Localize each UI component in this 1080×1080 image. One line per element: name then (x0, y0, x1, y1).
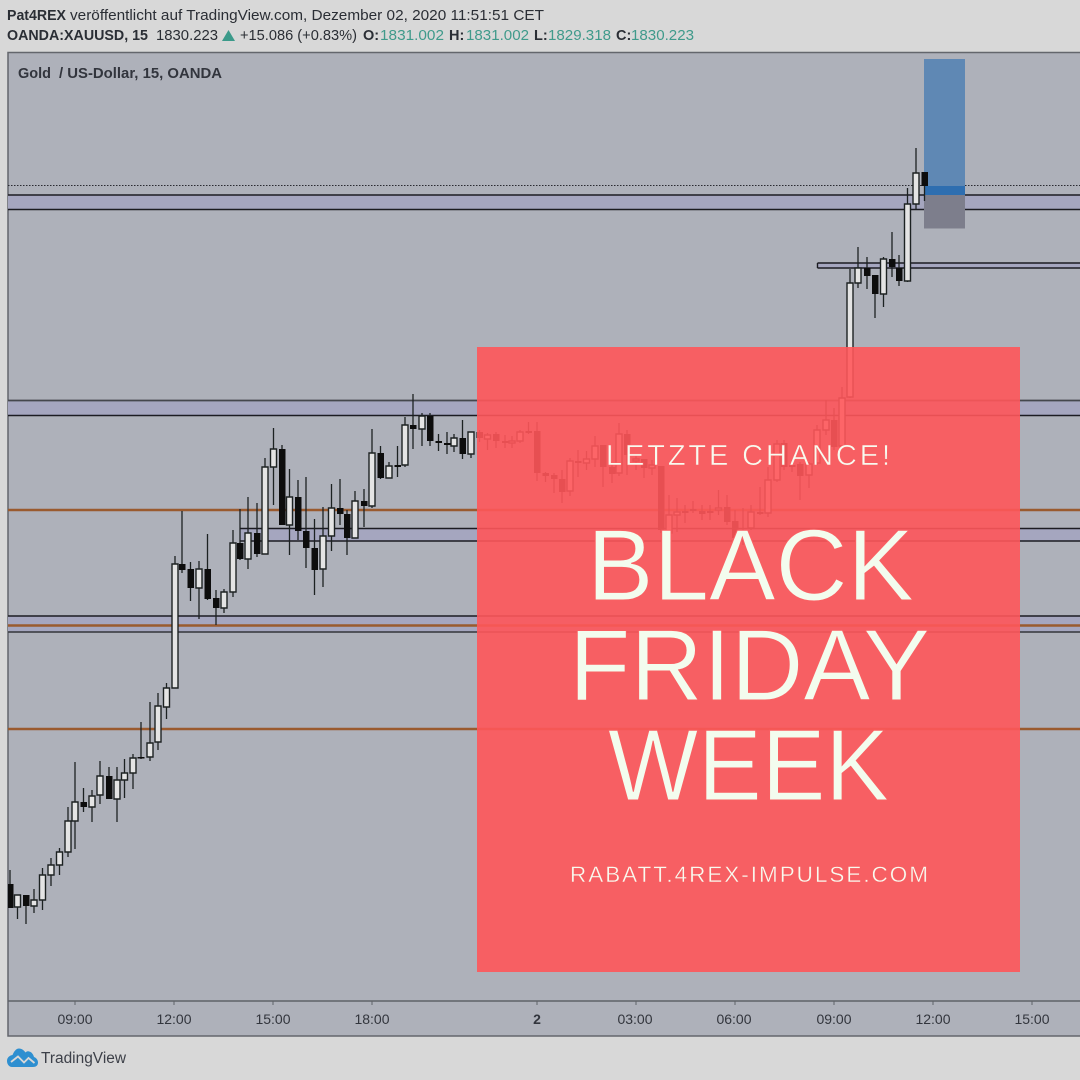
headline (569, 510, 930, 822)
header: publication info: 1831.002 (380, 28, 444, 44)
candlestick series (7, 148, 928, 924)
header: publication info: Pat4REX (7, 8, 66, 24)
header: publication info: 1831.002 (466, 28, 529, 44)
header: publication info (7, 8, 694, 44)
header: publication info: H: (449, 28, 464, 44)
headline: WEEK (608, 710, 889, 822)
time axis (8, 1001, 1080, 1027)
time axis: 09:00 (57, 1011, 93, 1027)
trade box: target and stop (924, 59, 965, 228)
header: publication info: O: (363, 28, 379, 44)
chart title: / US-Dollar, 15, OANDA (59, 66, 223, 82)
time axis: 06:00 (716, 1011, 752, 1027)
website link: RABATT.4REX-IMPULSE.COM (570, 862, 928, 887)
headline: BLACK (587, 510, 914, 622)
time axis: 18:00 (354, 1011, 390, 1027)
header: publication info: 1830.223 (156, 28, 218, 44)
header: publication info: C: (616, 28, 631, 44)
headline: FRIDAY (569, 610, 930, 722)
time axis: 15:00 (1014, 1011, 1050, 1027)
price zones and levels (8, 186, 1080, 729)
header: publication info: veröffentlicht auf TradingView.com, Dezember 02, 2020 11:51:51 CET (70, 8, 544, 24)
time axis: 2 (533, 1011, 541, 1027)
time axis: 15:00 (255, 1011, 291, 1027)
header: publication info: OANDA:XAUUSD, 15 (7, 28, 148, 44)
kicker text: LETZTE CHANCE! (606, 440, 890, 472)
time axis: 03:00 (617, 1011, 653, 1027)
time axis: 09:00 (816, 1011, 852, 1027)
header: publication info: 1829.318 (548, 28, 611, 44)
icon: TradingView logo (7, 1048, 38, 1067)
header: publication info: L: (534, 28, 548, 44)
time axis: 12:00 (156, 1011, 192, 1027)
logo wordmark: TradingView (41, 1050, 127, 1067)
header: publication info: 1830.223 (631, 28, 694, 44)
header: publication info: +15.086 (+0.83%) (240, 28, 357, 44)
promo panel (477, 347, 1020, 972)
time axis: 12:00 (915, 1011, 951, 1027)
chart title: Gold (18, 66, 51, 82)
